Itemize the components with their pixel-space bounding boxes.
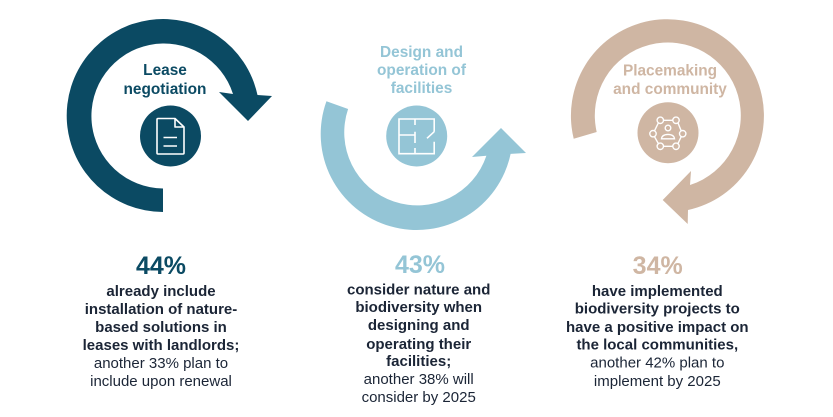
text block: design description: facilities; <box>386 353 451 370</box>
text block: placemaking description: implement by 2025 <box>594 373 721 390</box>
text block: lease description <box>83 283 239 390</box>
heading: lease negotiation: Lease <box>143 62 187 79</box>
stat: 34%: 34% <box>633 252 683 280</box>
heading: placemaking and community <box>613 62 727 98</box>
heading: design and operation of facilities: operation of <box>377 62 467 79</box>
heading: placemaking and community: Placemaking <box>623 62 717 80</box>
text block: design description: consider by 2025 <box>362 389 476 406</box>
text block: lease description: include upon renewal <box>90 373 232 390</box>
text block: lease description: already include <box>106 283 216 300</box>
icon: document <box>140 106 201 166</box>
arrow: design counter-clockwise <box>321 101 526 230</box>
heading: lease negotiation <box>124 62 206 98</box>
heading: design and operation of facilities: Design and <box>380 44 463 61</box>
icon: floor plan <box>386 106 447 166</box>
panel: design and operation <box>321 44 526 406</box>
arrow: lease negotiation clockwise <box>67 19 272 212</box>
text block: design description: another 38% will <box>364 371 474 388</box>
heading: design and operation of facilities: facilities <box>391 80 452 97</box>
text block: design description: designing and <box>368 317 470 334</box>
icon: community network <box>638 102 698 163</box>
heading: placemaking and community: and community <box>613 81 727 98</box>
text block: placemaking description <box>566 283 749 390</box>
text block: lease description: based solutions in <box>95 319 227 336</box>
text block: lease description: leases with landlords; <box>83 337 239 354</box>
text block: placemaking description: have a positive impact on <box>566 319 749 336</box>
text block: design description <box>347 282 490 406</box>
panel: placemaking and community <box>566 19 764 390</box>
text block: placemaking description: biodiversity projects to <box>575 300 740 318</box>
text block: lease description: installation of nature- <box>85 301 237 318</box>
arrow: placemaking clockwise <box>571 19 764 224</box>
stat: 43%: 43% <box>395 251 445 279</box>
panel: lease negotiation <box>67 19 272 390</box>
heading: design and operation of facilities <box>377 44 467 97</box>
heading: lease negotiation: negotiation <box>124 81 206 98</box>
text block: lease description: another 33% plan to <box>94 355 228 372</box>
stat: 44%: 44% <box>136 252 186 280</box>
text block: placemaking description: another 42% plan to <box>590 354 724 372</box>
text block: design description: biodiversity when <box>355 299 482 316</box>
text block: design description: operating their <box>366 336 471 353</box>
text block: design description: consider nature and <box>347 282 490 298</box>
text block: placemaking description: the local communities, <box>576 336 738 354</box>
text block: placemaking description: have implemented <box>592 283 723 300</box>
